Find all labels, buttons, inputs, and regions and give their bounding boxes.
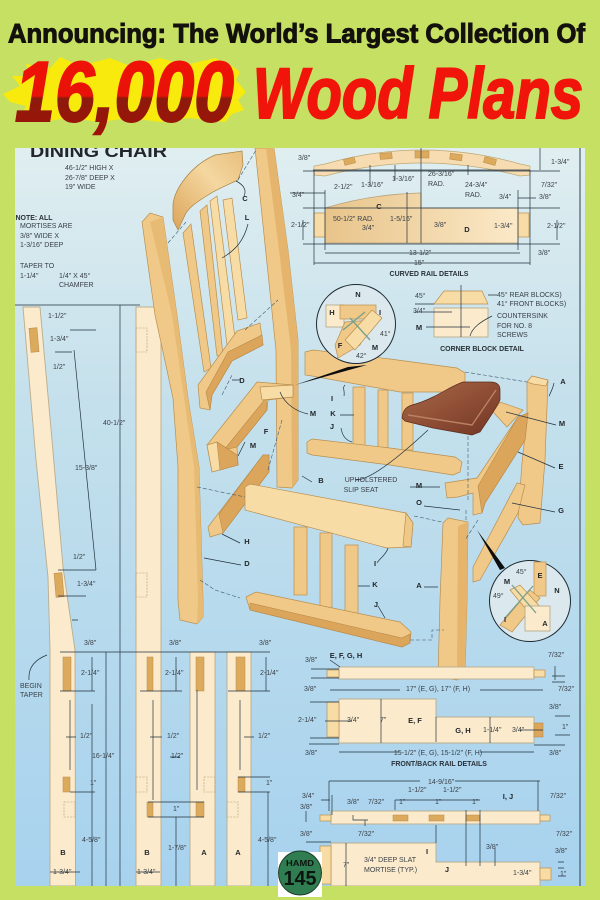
- text block: leg dimensions: 1-7/8": [168, 845, 187, 852]
- slat rail labels: MORTISE (TYP.): [364, 867, 417, 874]
- text block: chair part letters: E: [537, 571, 543, 580]
- text block: leg dimensions: 1/2": [167, 733, 180, 740]
- text block: chair part letters: I: [374, 559, 376, 568]
- text block: chair part letters: N: [554, 586, 560, 595]
- text block: chair part letters: 42°: [356, 352, 367, 360]
- text block: leg dimensions: 1-1/2": [48, 313, 67, 320]
- curved rail labels: 3/4": [362, 225, 375, 232]
- slat rail mortises: [393, 815, 480, 821]
- text block: chair part letters: 45°: [516, 568, 527, 576]
- dimension lines: legs: [15, 305, 270, 886]
- text block: chair size and notes: [15, 165, 115, 289]
- leg plan A right: [227, 652, 251, 886]
- curved rail labels: CURVED RAIL DETAILS: [390, 271, 469, 278]
- slat rail labels: 3/4": [302, 793, 315, 800]
- slat rail labels: 3/8": [486, 844, 499, 851]
- rail labels: E, F, G, H: [330, 651, 362, 660]
- heading: announcement line: Announcing: The World’s Largest Collection Of: [8, 18, 586, 48]
- curved rail labels: 2-1/2": [291, 222, 310, 229]
- curved rail labels: 3/4": [292, 192, 305, 199]
- wedge to lower circle: [477, 530, 505, 570]
- text block: leg dimensions: 16-1/4": [92, 753, 115, 760]
- curved rail labels: 26-3/16": [428, 171, 455, 178]
- text block: leg dimensions: 1/2": [80, 733, 93, 740]
- text block: chair size and notes: CHAMFER: [59, 282, 94, 289]
- text block: chair part letters: UPHOLSTERED: [345, 477, 397, 484]
- curved rail labels: 1-3/16": [392, 176, 415, 183]
- lower back rail D: [198, 323, 263, 410]
- slat two: [200, 205, 223, 356]
- panel: circular corner details: [295, 284, 570, 642]
- text block: leg dimensions: 1/2": [73, 554, 86, 561]
- rail labels: 17" (E, G), 17" (F, H): [406, 686, 470, 693]
- text block: chair size and notes: 26-7/8" DEEP X: [65, 175, 115, 182]
- text block: leg dimensions: 1/2": [171, 753, 184, 760]
- text block: leg dimensions: 2-1/4": [81, 670, 100, 677]
- curved rail labels: 1-3/4": [551, 159, 570, 166]
- text block: leg dimensions: 1": [266, 780, 273, 787]
- corner block labels: 41° FRONT BLOCKS): [497, 300, 566, 308]
- text block: leg dimensions: B: [60, 848, 66, 857]
- slat rail tenons: [320, 815, 550, 821]
- rail labels: 3/8": [305, 750, 318, 757]
- corner block labels: 45°: [415, 292, 426, 300]
- text block: chair size and notes: 1-1/4": [20, 273, 39, 280]
- text block: leg dimensions: 1-3/4": [50, 336, 69, 343]
- corner block labels: 45° REAR BLOCKS): [497, 291, 562, 299]
- drawing: far rear leg and back assembly: [142, 148, 298, 624]
- rail dimensions: [309, 660, 570, 752]
- rail labels: 3/8": [304, 686, 317, 693]
- text block: chair part letters: SLIP SEAT: [344, 487, 379, 494]
- rail labels: 7/32": [558, 686, 575, 693]
- text block: chair size and notes: 19" WIDE: [65, 184, 96, 191]
- badge: HAMD 145: 145: [284, 868, 316, 890]
- slat rail labels: 3/4" DEEP SLAT: [364, 857, 417, 864]
- leg mortises: [29, 328, 245, 817]
- curved rail labels: RAD.: [465, 192, 482, 199]
- corner block labels: [413, 291, 566, 353]
- text block: leg dimensions: A: [201, 848, 207, 857]
- curved rail labels: 1-3/4": [494, 223, 513, 230]
- badge: HAMD 145: HAMD: [286, 858, 314, 868]
- text block: leg dimensions: 2-1/4": [165, 670, 184, 677]
- slat rail labels: 1": [399, 799, 406, 806]
- slat rail labels: 3/8": [300, 804, 313, 811]
- slat rail labels: 1-1/2": [408, 787, 427, 794]
- text block: leg dimensions: 40-1/2": [103, 420, 126, 427]
- heading: 16,000: 16,000: [15, 45, 234, 140]
- rails I and J side view: [331, 843, 540, 886]
- rail labels: 3/8": [549, 750, 562, 757]
- text block: chair part letters: B: [318, 476, 324, 485]
- rear rail I: [305, 350, 465, 392]
- text block: chair part letters: D: [239, 376, 245, 385]
- rail labels: 3/4": [347, 717, 360, 724]
- text block: leg dimensions: 1/2": [53, 364, 66, 371]
- slat rail labels: 3/8": [300, 831, 313, 838]
- curved rail labels: [291, 155, 570, 278]
- curved rail labels: 13-1/2": [409, 250, 432, 257]
- slat rail labels: 7/32": [556, 831, 573, 838]
- slat rail labels: [300, 779, 573, 878]
- curved rail labels: 15": [414, 260, 425, 267]
- text block: chair part letters: K: [330, 409, 336, 418]
- text block: chair part letters: M: [372, 343, 378, 352]
- small back corner block: [493, 402, 523, 427]
- text block: chair size and notes: 46-1/2" HIGH X: [65, 165, 114, 172]
- text block: chair part letters: M: [504, 577, 510, 586]
- text block: chair part letters: I: [331, 394, 333, 403]
- corner block labels: FOR NO. 8: [497, 323, 532, 330]
- curved rail labels: 50-1/2" RAD.: [333, 216, 374, 223]
- slat rail labels: I, J: [503, 792, 513, 801]
- text block: leg dimensions: 1": [90, 780, 97, 787]
- side view tenons: [320, 846, 551, 884]
- rail dimensions: [290, 148, 560, 265]
- text block: chair part letters: I: [504, 615, 506, 624]
- text block: chair part letters: O: [416, 498, 422, 507]
- text block: chair part letters: J: [330, 422, 334, 431]
- text block: chair size and notes: NOTE: ALL: [15, 215, 53, 222]
- corner block labels: SCREWS: [497, 332, 528, 339]
- slat rail labels: J: [445, 865, 449, 874]
- text block: leg dimensions: 3/8": [84, 640, 97, 647]
- text block: leg dimensions: 3/8": [259, 640, 272, 647]
- text block: chair part letters: M: [310, 409, 316, 418]
- slat rail dimensions: [306, 781, 566, 886]
- text block: chair part letters: C: [242, 194, 248, 203]
- text block: leg dimensions: A: [235, 848, 241, 857]
- front rail I: [245, 484, 413, 548]
- front post A: [438, 518, 468, 680]
- rail labels: 1-1/4": [483, 727, 502, 734]
- text block: leg dimensions: 4-5/8": [82, 837, 101, 844]
- side rail E: [445, 413, 528, 515]
- drawing: leader lines: [168, 150, 556, 640]
- rail E F G H side view: [339, 699, 534, 743]
- rail top view: [339, 667, 534, 679]
- curved rail labels: 3/8": [298, 155, 311, 162]
- text block: leg dimensions: 1-3/4": [137, 869, 156, 876]
- text block: chair part letters: G: [558, 506, 564, 515]
- wedge to upper circle: [295, 365, 367, 385]
- rear slats K: [353, 387, 413, 450]
- text block: chair size and notes: 1-3/16" DEEP: [20, 242, 64, 249]
- corner block labels: CORNER BLOCK DETAIL: [440, 346, 525, 353]
- leg plan B straight: [136, 307, 161, 886]
- slat one: [183, 224, 211, 372]
- slat rail labels: 1": [560, 871, 567, 878]
- rail labels: E, F: [408, 716, 422, 725]
- slat rail labels: 3/8": [347, 799, 360, 806]
- slat rail labels: 14-9/16": [428, 779, 455, 786]
- curved rail labels: 24-3/4": [465, 182, 488, 189]
- text block: chair size and notes: MORTISES ARE: [20, 223, 73, 230]
- drawing: slat rail details: [300, 779, 573, 886]
- text block: leg dimensions: 15-3/8": [75, 465, 98, 472]
- slat rail labels: 3/8": [555, 848, 568, 855]
- corner block labels: 3/4": [413, 308, 426, 315]
- curved rail labels: 3/8": [539, 194, 552, 201]
- slat rail labels: 1": [472, 799, 479, 806]
- leg plan B curved: [23, 307, 76, 886]
- corner block labels: COUNTERSINK: [497, 313, 548, 320]
- slat rail labels: 1-3/4": [513, 870, 532, 877]
- slat rail top view: [331, 811, 540, 824]
- curved rail labels: 3/4": [499, 194, 512, 201]
- slat rail labels: 7": [343, 862, 350, 869]
- rail labels: 7": [380, 717, 387, 724]
- text block: chair part letters: A: [542, 619, 548, 628]
- text block: chair part letters: K: [372, 580, 378, 589]
- text block: leg dimensions: BEGIN: [20, 683, 42, 690]
- text block: chair part letters: H: [244, 537, 250, 546]
- rear rail J: [307, 439, 462, 475]
- curved rail labels: 3/8": [434, 222, 447, 229]
- drawing: curved rail details: [290, 148, 570, 278]
- rail top tenons: [327, 670, 545, 677]
- text block: leg dimensions: TAPER: [20, 692, 43, 699]
- text block: chair part letters: F: [264, 427, 269, 436]
- text block: chair part letters: [239, 194, 566, 628]
- slat rail labels: 1-1/2": [443, 787, 462, 794]
- rail mortises: [343, 151, 497, 165]
- slat rail labels: 7/32": [550, 793, 567, 800]
- curved rail labels: 2-1/2": [547, 223, 566, 230]
- front bottom rail J: [246, 592, 411, 647]
- text block: chair part letters: M: [559, 419, 565, 428]
- slat rail labels: 7/32": [358, 831, 375, 838]
- curved rail labels: D: [464, 225, 470, 234]
- near back post: [255, 148, 298, 488]
- text block: leg dimensions: 1-3/4": [77, 581, 96, 588]
- drawing: tall leg elevations: [23, 307, 251, 886]
- text block: leg dimensions: 2-1/4": [260, 670, 279, 677]
- corner block labels: M: [416, 323, 422, 332]
- text block: leg dimensions: 1/2": [258, 733, 271, 740]
- rail labels: 3/8": [305, 657, 318, 664]
- text block: chair part letters: E: [558, 462, 564, 471]
- rail labels: 3/4": [512, 727, 525, 734]
- rail labels: 1": [562, 724, 569, 731]
- title: dining chair: DINING CHAIR: [30, 142, 167, 161]
- slat rail labels: I: [426, 847, 428, 856]
- upholstered seat: [402, 382, 500, 435]
- text block: chair part letters: J: [374, 600, 378, 609]
- rail labels: 2-1/4": [298, 717, 317, 724]
- slat three: [210, 196, 235, 345]
- rail labels: 15-1/2" (E, G), 15-1/2" (F, H): [394, 750, 482, 757]
- curved rail labels: 2-1/2": [334, 184, 353, 191]
- text block: chair part letters: 49°: [493, 592, 504, 600]
- slat rail labels: 1": [435, 799, 442, 806]
- slat rail labels: 7/32": [368, 799, 385, 806]
- side rail H: [208, 455, 269, 537]
- yellow starburst behind number: [3, 57, 246, 122]
- drawing: corner block detail: [413, 285, 566, 353]
- rail labels: 3/8": [549, 704, 562, 711]
- badge: HAMD 145: [278, 851, 322, 897]
- text block: chair size and notes: 3/8" WIDE X: [20, 233, 59, 240]
- text block: leg dimensions: [20, 313, 279, 876]
- lower circle detail: [490, 560, 570, 642]
- rail side tenons: [327, 702, 543, 737]
- rail labels: 7/32": [548, 652, 565, 659]
- text block: chair part letters: M: [416, 481, 422, 490]
- curved rail labels: 1-5/16": [390, 216, 413, 223]
- top curved rail: [314, 150, 530, 176]
- text block: chair size and notes: 1/4" X 45°: [59, 272, 91, 280]
- text block: chair part letters: A: [416, 581, 422, 590]
- text block: chair part letters: L: [245, 213, 250, 222]
- text block: chair part letters: A: [560, 377, 566, 386]
- text block: chair part letters: I: [379, 308, 381, 317]
- text block: chair size and notes: TAPER TO: [20, 263, 55, 270]
- back crest rail: [173, 151, 243, 230]
- drawing: chair seat frame parts: [207, 350, 548, 680]
- curved rail labels: 3/8": [538, 250, 551, 257]
- rear leg piece: [142, 213, 203, 624]
- side rail G: [473, 483, 525, 582]
- text block: chair part letters: N: [355, 290, 361, 299]
- slat four: [223, 198, 247, 320]
- text block: leg dimensions: 3/8": [169, 640, 182, 647]
- curved rail labels: 7/32": [541, 182, 558, 189]
- side rail F: [207, 382, 293, 472]
- text block: chair part letters: F: [338, 341, 343, 350]
- curved rail labels: RAD.: [428, 181, 445, 188]
- rail labels: G, H: [455, 726, 471, 735]
- text block: leg dimensions: 1-3/4": [53, 869, 72, 876]
- rail labels: [298, 651, 575, 768]
- upper circle detail: [316, 284, 396, 364]
- drawing: front and back rail details: [298, 651, 575, 768]
- curved rail labels: C: [376, 202, 382, 211]
- text block: leg dimensions: B: [144, 848, 150, 857]
- seat highlight: [408, 390, 496, 425]
- rear right post A: [518, 376, 548, 525]
- rail C and D plan: [325, 193, 518, 243]
- rail tenons: [314, 213, 529, 237]
- text block: chair part letters: D: [244, 559, 250, 568]
- panel: woodworking plan: [15, 142, 585, 886]
- text block: chair part letters: 41°: [380, 330, 391, 338]
- text block: chair part letters: H: [329, 308, 335, 317]
- curved rail labels: 1-3/16": [361, 182, 384, 189]
- text block: chair part letters: M: [250, 441, 256, 450]
- front slats K: [294, 527, 358, 620]
- text block: leg dimensions: 1": [173, 806, 180, 813]
- text block: leg dimensions: 4-5/8": [258, 837, 277, 844]
- leg plan A left: [190, 652, 215, 886]
- rail labels: FRONT/BACK RAIL DETAILS: [391, 761, 487, 768]
